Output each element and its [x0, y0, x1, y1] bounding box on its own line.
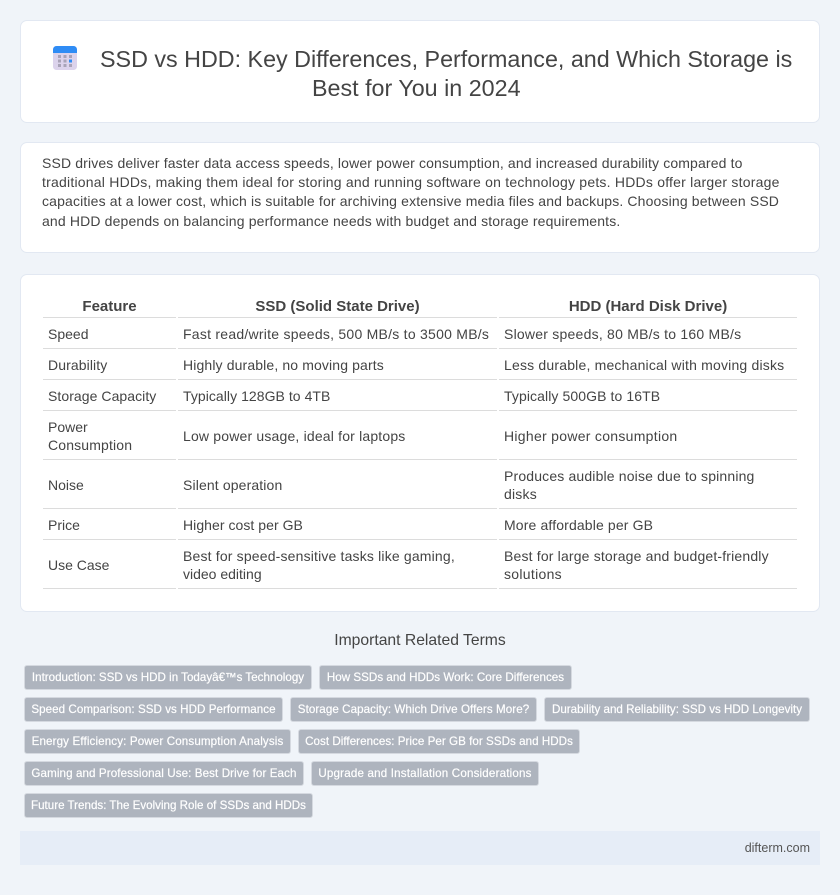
- title: Best for You in 2024: [312, 75, 521, 101]
- row: durability: [48, 357, 784, 373]
- row: storage capacity: Typically 500GB to 16TB: [504, 388, 660, 404]
- comparison table panel: [20, 274, 820, 612]
- row: storage capacity: [48, 388, 660, 404]
- tag: [298, 729, 580, 754]
- intro text: SSD drives deliver faster data access speeds, lower power consumption, and increased durability compared to: [42, 155, 743, 171]
- row: durability: Highly durable, no moving parts: [183, 357, 384, 373]
- row: use case: [48, 548, 769, 582]
- row: use case: Best for speed-sensitive tasks like gaming,: [183, 548, 455, 564]
- tag: Durability and Reliability: SSD vs HDD Longevity: [552, 703, 802, 716]
- icon: calendar grid: [53, 46, 77, 70]
- row: power consumption: Low power usage, ideal for laptops: [183, 428, 405, 444]
- row: power consumption: [48, 419, 678, 453]
- row: use case: video editing: [183, 566, 262, 582]
- row: speed: Fast read/write speeds, 500 MB/s to 3500 MB/s: [183, 326, 489, 342]
- row: speed: Slower speeds, 80 MB/s to 160 MB/s: [504, 326, 741, 342]
- tag: [24, 697, 283, 722]
- tag: [544, 697, 810, 722]
- row: price: Price: [48, 517, 80, 533]
- related terms tags: [24, 665, 810, 818]
- row: price: More affordable per GB: [504, 517, 653, 533]
- row: storage capacity: Storage Capacity: [48, 388, 156, 404]
- footer site name: difterm.com: [745, 841, 810, 855]
- tag: [24, 665, 312, 690]
- comparison table: [43, 298, 797, 589]
- tag: [24, 793, 313, 818]
- intro text: and HDD depends on balancing performance needs with budget and storage requirements.: [42, 213, 620, 229]
- intro text: [42, 155, 780, 229]
- tag: [24, 761, 304, 786]
- tag: How SSDs and HDDs Work: Core Differences: [327, 671, 564, 684]
- row: power consumption: Consumption: [48, 437, 132, 453]
- title: [100, 46, 792, 101]
- row: noise: Noise: [48, 477, 84, 493]
- row: durability: Less durable, mechanical with moving disks: [504, 357, 784, 373]
- row: use case: Use Case: [48, 557, 109, 573]
- header panel: [20, 20, 820, 123]
- tag: Speed Comparison: SSD vs HDD Performance: [31, 703, 276, 716]
- intro panel: [20, 142, 820, 253]
- header row: HDD (Hard Disk Drive): [569, 298, 727, 315]
- row: speed: Speed: [48, 326, 88, 342]
- row: speed: [48, 326, 741, 342]
- intro text: traditional HDDs, making them ideal for storing and running software on technology pets. HDDs offer larger storage: [42, 174, 780, 190]
- tag: Future Trends: The Evolving Role of SSDs and HDDs: [31, 799, 306, 812]
- row: price: [48, 517, 653, 533]
- row: use case: Best for large storage and budget-friendly: [504, 548, 769, 564]
- tag: [319, 665, 572, 690]
- tag: Introduction: SSD vs HDD in Todayâ€™s Technology: [32, 671, 304, 684]
- header row: [82, 298, 727, 315]
- row: use case: solutions: [504, 566, 562, 582]
- related terms heading: Important Related Terms: [334, 632, 506, 649]
- row: noise: disks: [504, 486, 537, 502]
- row: power consumption: Power: [48, 419, 88, 435]
- tag: Storage Capacity: Which Drive Offers More?: [298, 703, 529, 716]
- row: noise: Silent operation: [183, 477, 282, 493]
- footer bar: [20, 831, 820, 865]
- tag: Energy Efficiency: Power Consumption Analysis: [32, 735, 283, 748]
- row: noise: Produces audible noise due to spinning: [504, 468, 754, 484]
- tag: [290, 697, 537, 722]
- tag: Gaming and Professional Use: Best Drive for Each: [31, 767, 297, 780]
- tag: [24, 729, 291, 754]
- header row: Feature: [82, 298, 137, 315]
- row: power consumption: Higher power consumption: [504, 428, 678, 444]
- row: price: Higher cost per GB: [183, 517, 303, 533]
- header row: SSD (Solid State Drive): [255, 298, 420, 315]
- tag: Upgrade and Installation Considerations: [318, 767, 532, 780]
- row: storage capacity: Typically 128GB to 4TB: [183, 388, 330, 404]
- row: noise: [48, 468, 754, 502]
- title: SSD vs HDD: Key Differences, Performance, and Which Storage is: [100, 46, 792, 72]
- tag: Cost Differences: Price Per GB for SSDs and HDDs: [305, 735, 573, 748]
- intro text: capacities at a lower cost, which is suitable for archiving extensive media files and backups. Choosing between SSD: [42, 193, 779, 209]
- tag: [311, 761, 539, 786]
- row: durability: Durability: [48, 357, 107, 373]
